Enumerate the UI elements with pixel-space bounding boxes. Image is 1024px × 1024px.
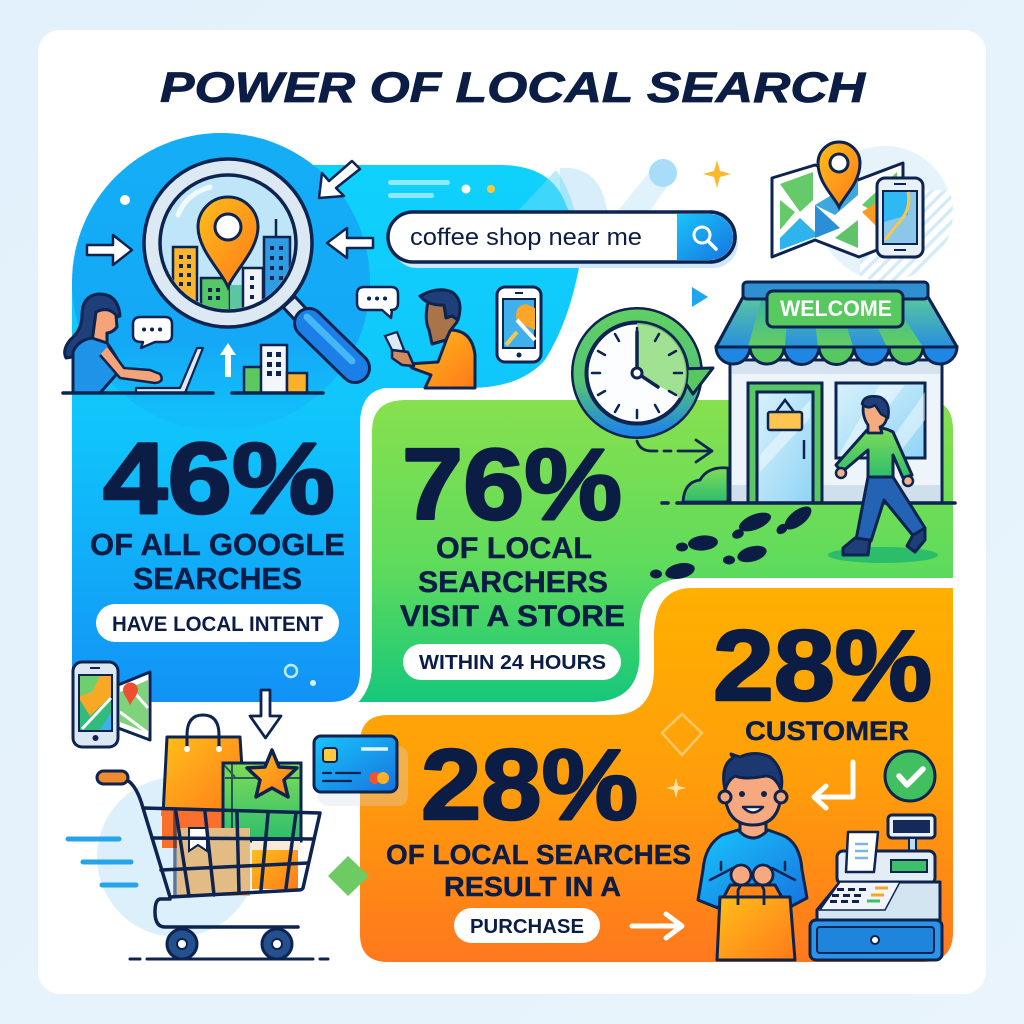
awning <box>716 282 957 364</box>
folded map with pin and phone <box>772 142 960 290</box>
panel: 76% green <box>350 396 956 706</box>
door <box>748 383 822 503</box>
text: of all google searches: OF ALL GOOGLE <box>90 527 345 562</box>
search bar: coffee shop near me <box>410 224 642 251</box>
cash register <box>810 815 942 960</box>
return arrow <box>814 762 853 808</box>
search bar <box>388 212 738 268</box>
title: POWER OF LOCAL SEARCH <box>160 64 866 112</box>
pill: purchase <box>454 908 600 943</box>
window <box>836 383 925 458</box>
dashed arrow to store <box>637 440 712 462</box>
stat: 28% customer: 28% <box>713 610 932 722</box>
shopping cart <box>68 715 328 959</box>
phone and map icon <box>73 662 150 747</box>
small buildings <box>232 345 323 393</box>
green diamond <box>328 856 369 896</box>
green gift box <box>223 763 301 841</box>
store <box>662 282 957 503</box>
text: of all google searches: SEARCHES <box>133 561 302 596</box>
clock with green arrow <box>579 315 713 431</box>
man with phone <box>385 290 475 388</box>
pill: within 24 hours <box>403 644 621 680</box>
phone with map <box>497 287 541 362</box>
walking man <box>828 396 938 563</box>
welcome sign <box>767 291 903 327</box>
happy customer <box>698 754 807 960</box>
pill: within 24 hours: WITHIN 24 HOURS <box>419 652 606 674</box>
decoration: pale shapes behind search bar <box>560 159 731 307</box>
magnifier with pin and city <box>144 159 355 368</box>
pill: have local intent <box>96 604 339 642</box>
footprints <box>650 502 815 581</box>
star <box>247 750 297 797</box>
credit card <box>314 736 408 806</box>
check badge <box>885 751 935 801</box>
text: of local searchers visit a store <box>400 532 625 633</box>
pill: purchase: PURCHASE <box>470 916 584 938</box>
down arrow <box>250 690 281 738</box>
orange panel accents <box>662 714 702 798</box>
arrow: to customer <box>632 914 682 938</box>
text: of local searchers visit a store: VISIT A STORE <box>400 600 625 633</box>
text: customer: CUSTOMER <box>745 716 909 746</box>
pill: have local intent: HAVE LOCAL INTENT <box>112 613 323 636</box>
arrows pointing to magnifier <box>87 161 373 377</box>
speech bubble right <box>357 287 398 318</box>
stat: 28% of searches: 28% <box>421 729 638 841</box>
text: of local searches result in a: OF LOCAL SEARCHES <box>386 839 691 870</box>
stat: 76%: 76% <box>402 429 622 541</box>
speech bubble left <box>133 317 172 348</box>
panel: 28% orange <box>360 588 953 962</box>
text: of local searches result in a <box>386 839 691 902</box>
text: of local searches result in a: RESULT IN A <box>444 871 621 902</box>
text: of local searchers visit a store: SEARCHERS <box>418 566 608 599</box>
text: of local searchers visit a store: OF LOCAL <box>436 532 592 565</box>
woman with laptop <box>63 294 213 393</box>
panel: 46% blue <box>72 133 581 702</box>
cart frame <box>127 780 328 959</box>
boxes <box>177 828 300 896</box>
welcome sign: WELCOME <box>780 296 892 321</box>
shopping bag <box>162 715 245 848</box>
stat: 46%: 46% <box>103 423 335 535</box>
text: of all google searches <box>90 527 345 596</box>
